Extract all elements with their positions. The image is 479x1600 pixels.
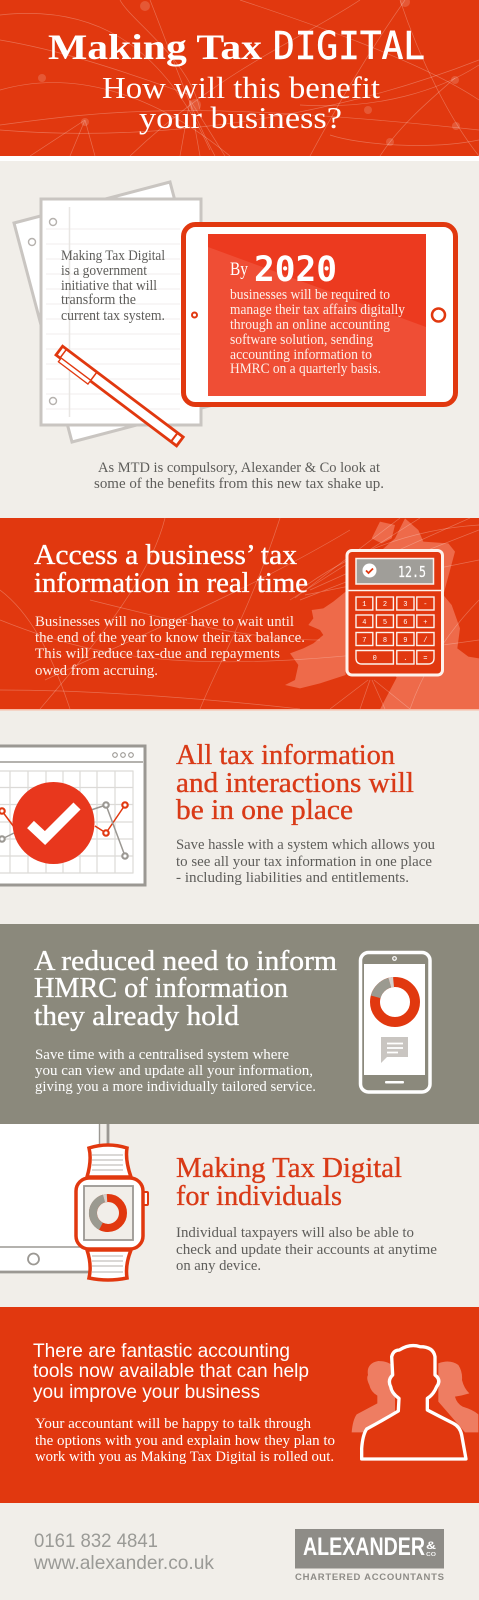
heading: reduced need: they already hold xyxy=(34,1001,239,1032)
icon: calculator: + xyxy=(423,619,428,627)
icon: calculator: 3 xyxy=(403,601,408,609)
text block: paper note: Making Tax Digital xyxy=(61,248,165,264)
text block: by 2020: software solution, sending xyxy=(230,332,373,348)
text block: individuals xyxy=(176,1225,437,1274)
icon: calculator: 12.5 xyxy=(398,563,426,581)
heading: reduced need: HMRC of information xyxy=(34,973,288,1004)
icon: calculator: 0 xyxy=(373,655,377,663)
text block: accounting tools: Your accountant will be happy to talk through xyxy=(35,1416,312,1432)
text block: one place: - including liabilities and entitlements. xyxy=(176,870,409,886)
heading: accounting tools: tools now available that can help xyxy=(33,1360,309,1382)
text block: real time: owed from accruing. xyxy=(35,663,158,679)
heading: real time xyxy=(34,540,308,599)
panel: real time xyxy=(0,518,479,710)
map: UK and Ireland xyxy=(285,518,479,709)
text block: intro xyxy=(94,460,384,492)
text block: by 2020: HMRC on a quarterly basis. xyxy=(230,361,381,377)
logo: & xyxy=(426,1540,436,1552)
icon: calculator: 5 xyxy=(383,619,387,627)
text block: by 2020 xyxy=(230,250,406,377)
text block: individuals: check and update their accounts at anytime xyxy=(176,1242,437,1258)
donut chart xyxy=(93,1198,123,1228)
icon: calculator: = xyxy=(423,655,428,663)
text block: by 2020: through an online accounting xyxy=(230,317,390,333)
heading: one place: and interactions will xyxy=(176,768,414,799)
text block: intro: As MTD is compulsory, Alexander & Co look at xyxy=(98,460,381,476)
icon: calculator: / xyxy=(423,637,428,645)
heading: accounting tools: There are fantastic accounting xyxy=(33,1340,290,1362)
icon: calculator: 6 xyxy=(403,619,408,627)
logo: co xyxy=(426,1551,436,1558)
icon: calculator: 4 xyxy=(362,619,367,627)
title: Making Tax xyxy=(48,27,262,67)
heading: real time: information in real time xyxy=(34,568,308,599)
text block: by 2020: 2020 xyxy=(254,250,337,290)
icon: smartphone xyxy=(360,952,430,1092)
text block: reduced need xyxy=(35,1047,316,1095)
text block: paper note: initiative that will xyxy=(61,278,157,294)
text block: by 2020: accounting information to xyxy=(230,347,372,363)
heading: accounting tools xyxy=(33,1340,309,1403)
icon: calculator: - xyxy=(423,601,428,609)
heading: reduced need: A reduced need to inform xyxy=(34,946,337,977)
icon: browser chart window xyxy=(0,746,145,885)
icon: calculator: 1 xyxy=(362,601,367,609)
icon: calculator xyxy=(347,550,442,675)
text block: real time xyxy=(35,614,305,679)
text block: by 2020: By xyxy=(230,259,248,280)
icon: calculator: . xyxy=(403,655,408,663)
icon: tablet xyxy=(184,224,456,404)
logo: ALEXANDER xyxy=(303,1533,425,1561)
panel: accounting tools xyxy=(0,1307,479,1503)
heading: individuals: Making Tax Digital xyxy=(176,1153,402,1184)
heading: accounting tools: you improve your business xyxy=(33,1381,260,1403)
illustration: paper sheets xyxy=(14,182,228,442)
subtitle xyxy=(102,70,380,135)
icon: calculator: 2 xyxy=(383,601,387,609)
logo: CHARTERED ACCOUNTANTS xyxy=(295,1572,444,1583)
text block: accounting tools: the options with you and explain how they plan to xyxy=(35,1433,335,1449)
text block: reduced need: Save time with a centralised system where xyxy=(35,1047,289,1063)
text block: accounting tools xyxy=(35,1416,335,1465)
text block: one place xyxy=(176,837,435,886)
text block: paper note: is a government xyxy=(61,263,147,279)
text block: paper note: transform the xyxy=(61,292,136,308)
subtitle: How will this benefit xyxy=(102,70,380,105)
text block: by 2020: manage their tax affairs digitally xyxy=(230,302,406,318)
donut chart xyxy=(375,982,415,1022)
contact details xyxy=(33,1530,214,1574)
text block: reduced need: you can view and update all your information, xyxy=(35,1063,313,1079)
text block: paper note xyxy=(61,248,165,324)
header banner xyxy=(0,0,479,161)
title: DIGITAL xyxy=(273,24,425,68)
text block: one place: Save hassle with a system which allows you xyxy=(176,837,435,853)
icon: calculator: 9 xyxy=(403,637,408,645)
heading: individuals xyxy=(176,1153,402,1212)
icon: smartwatch xyxy=(76,1145,148,1280)
icon: calculator: 8 xyxy=(383,637,387,645)
subtitle: your business? xyxy=(139,100,342,135)
text block: accounting tools: work with you as Making Tax Digital is rolled out. xyxy=(35,1449,334,1465)
icon: pen xyxy=(54,346,183,449)
icon: calculator: 7 xyxy=(362,637,367,645)
text block: intro: some of the benefits from this new tax shake up. xyxy=(94,476,384,492)
heading: one place xyxy=(176,740,414,826)
text block: one place: to see all your tax information in one place xyxy=(176,854,432,870)
text block: by 2020: businesses will be required to xyxy=(230,287,390,303)
text block: individuals: on any device. xyxy=(176,1258,261,1274)
text block: real time: Businesses will no longer have to wait until xyxy=(35,614,294,630)
panel: reduced need xyxy=(0,924,479,1124)
contact details: www.alexander.co.uk xyxy=(33,1552,214,1574)
heading: one place: All tax information xyxy=(176,740,395,771)
text block: individuals: Individual taxpayers will also be able to xyxy=(176,1225,414,1241)
heading: real time: Access a business’ tax xyxy=(34,540,297,571)
title xyxy=(48,24,425,68)
heading: one place: be in one place xyxy=(176,795,353,826)
text block: paper note: current tax system. xyxy=(61,308,165,324)
logo xyxy=(295,1529,444,1583)
icon: people xyxy=(352,1346,478,1459)
contact details: 0161 832 4841 xyxy=(34,1530,158,1552)
heading: reduced need xyxy=(34,946,337,1032)
text block: reduced need: giving you a more individually tailored service. xyxy=(35,1079,316,1095)
icon: tablet fragment xyxy=(0,1124,108,1272)
text block: real time: This will reduce tax-due and repayments xyxy=(35,646,280,662)
text block: real time: the end of the year to know their tax balance. xyxy=(35,630,305,646)
heading: individuals: for individuals xyxy=(176,1181,342,1212)
